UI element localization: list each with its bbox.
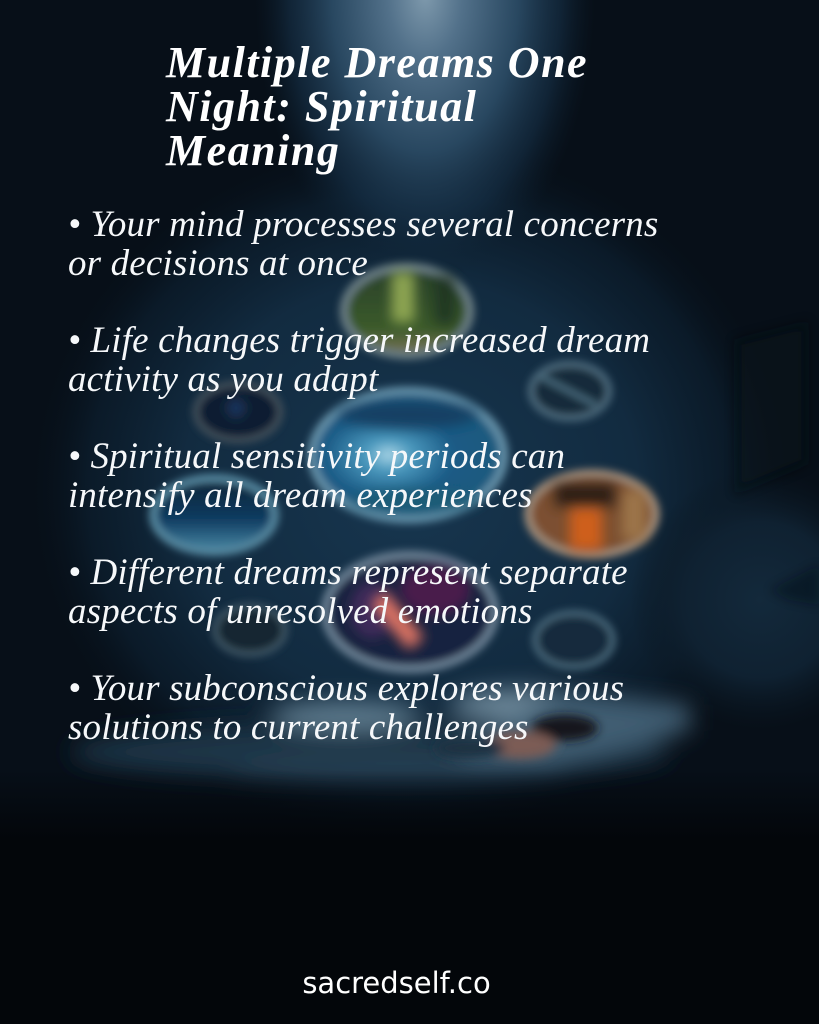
window (738, 325, 819, 605)
dream bubble: small lower right ring (535, 613, 613, 667)
bullet 5: solutions to current challenges (68, 707, 529, 748)
bullet 5 (68, 668, 624, 748)
dream bubble: small lower left ring (215, 606, 285, 654)
bullet 2: activity as you adapt (68, 359, 378, 400)
bullet 1: or decisions at once (68, 243, 368, 284)
bed (70, 689, 690, 780)
bullet 3: intensify all dream experiences (68, 475, 533, 516)
bullet 3: • Spiritual sensitivity periods can (68, 436, 565, 477)
bullet 1 (68, 204, 658, 284)
dream bubble: cosmic purple (325, 555, 495, 669)
bullet 2: • Life changes trigger increased dream (68, 320, 650, 361)
bullet 1: • Your mind processes several concerns (68, 204, 658, 245)
dream bubble: forest (344, 267, 470, 355)
footer: sacredself.co (302, 966, 491, 1000)
title: Multiple Dreams One (166, 38, 588, 87)
dream bubble: lower left ocean (153, 478, 275, 552)
bullet 4: aspects of unresolved emotions (68, 591, 533, 632)
title: Meaning (166, 126, 340, 175)
dim room glow (30, 140, 790, 840)
bullet 5: • Your subconscious explores various (68, 668, 624, 709)
dream bubble: central ocean (312, 391, 504, 519)
bullet 2 (68, 320, 650, 400)
bullet 3 (68, 436, 565, 516)
floor fade (0, 770, 819, 840)
dream bubble: small upper left ring (196, 384, 280, 440)
light beam (255, 0, 595, 280)
title: Night: Spiritual (166, 82, 477, 131)
bullet 4: • Different dreams represent separate (68, 552, 628, 593)
dream bubble: small upper right ring (531, 364, 609, 418)
dream bubble: orange doorway (528, 473, 656, 555)
bullet 4 (68, 552, 628, 632)
title (165, 38, 588, 175)
sleeping figure (435, 715, 598, 759)
